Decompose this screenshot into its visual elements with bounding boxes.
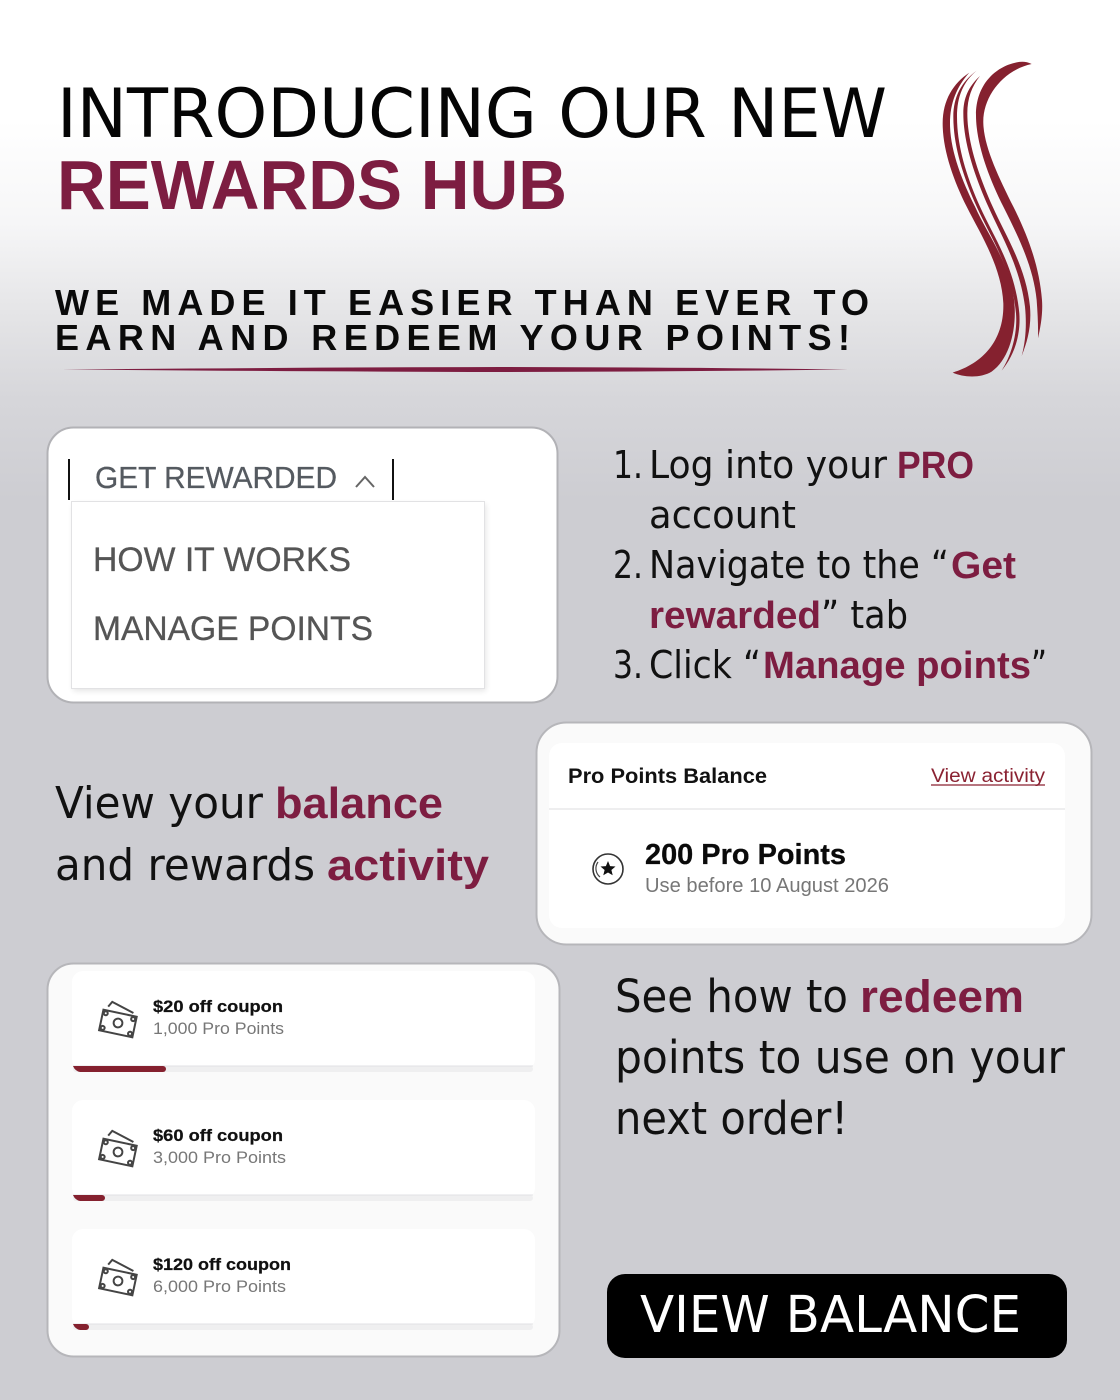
view activity link: View activity xyxy=(931,766,1046,787)
redeem text: next order! xyxy=(615,1092,848,1145)
coupon: $60: $60 off coupon xyxy=(153,1126,283,1145)
dropdown menu: MANAGE POINTS xyxy=(93,610,373,648)
balance text xyxy=(55,778,490,891)
redeem text: redeem xyxy=(860,971,1024,1022)
subheading: WE MADE IT EASIER THAN EVER TO xyxy=(55,282,869,323)
coupon: $20 xyxy=(72,971,535,1072)
title xyxy=(57,75,887,224)
steps list: Navigate to the “ xyxy=(649,543,949,587)
redeem text: See how to xyxy=(615,970,848,1023)
title: INTRODUCING OUR NEW xyxy=(57,75,887,154)
dropdown menu: HOW IT WORKS xyxy=(93,541,351,579)
dropdown menu xyxy=(72,502,484,688)
coupon: $20: 1,000 Pro Points xyxy=(153,1019,284,1038)
redeem text: points to use on your xyxy=(615,1031,1065,1084)
steps list: Get xyxy=(951,545,1016,587)
balance text: and rewards xyxy=(55,840,315,891)
points value: 200 Pro Points xyxy=(645,839,846,871)
icon: star coin xyxy=(593,854,623,884)
nav divider bars xyxy=(69,459,393,500)
coupon: $120: $120 off coupon xyxy=(153,1255,291,1274)
redeem text xyxy=(615,970,1065,1145)
heading underline xyxy=(62,367,848,372)
button: view balance xyxy=(607,1274,1067,1358)
balance text: balance xyxy=(275,779,443,828)
steps list: 1. xyxy=(613,443,643,487)
coupon: $60: 3,000 Pro Points xyxy=(153,1148,286,1167)
panel: navigation menu xyxy=(48,428,558,702)
balance text: activity xyxy=(327,841,490,890)
icon: logo S swirl xyxy=(943,62,1042,377)
steps list: Log into your xyxy=(649,443,887,487)
steps list: 3. xyxy=(613,643,643,687)
dropdown shadow xyxy=(73,504,486,691)
panel: pro points balance xyxy=(536,722,1092,944)
coupon: $120: 6,000 Pro Points xyxy=(153,1277,286,1296)
icon: chevron up xyxy=(356,477,374,487)
balance heading: Pro Points Balance xyxy=(568,765,767,788)
steps list: account xyxy=(649,493,796,537)
menu label: get rewarded: GET REWARDED xyxy=(95,460,337,495)
steps list: ” xyxy=(1031,643,1047,687)
coupon: $60 xyxy=(72,1100,535,1201)
steps list: Manage points xyxy=(763,645,1031,687)
steps list: PRO xyxy=(897,445,974,487)
balance text: View your xyxy=(55,778,264,829)
coupon: $20: $20 off coupon xyxy=(153,997,283,1016)
coupon: $120 xyxy=(72,1229,535,1330)
panel: coupons xyxy=(48,964,560,1356)
subheading: EARN AND REDEEM YOUR POINTS! xyxy=(55,317,850,358)
subheading xyxy=(55,282,869,358)
steps list: Click “ xyxy=(649,643,761,687)
steps list: ” tab xyxy=(821,593,908,637)
steps list xyxy=(613,443,1047,687)
steps list: 2. xyxy=(613,543,643,587)
button: view balance: VIEW BALANCE xyxy=(640,1286,1021,1345)
title: REWARDS HUB xyxy=(57,146,567,224)
expiry note: Use before 10 August 2026 xyxy=(645,875,889,897)
steps list: rewarded xyxy=(649,595,821,637)
